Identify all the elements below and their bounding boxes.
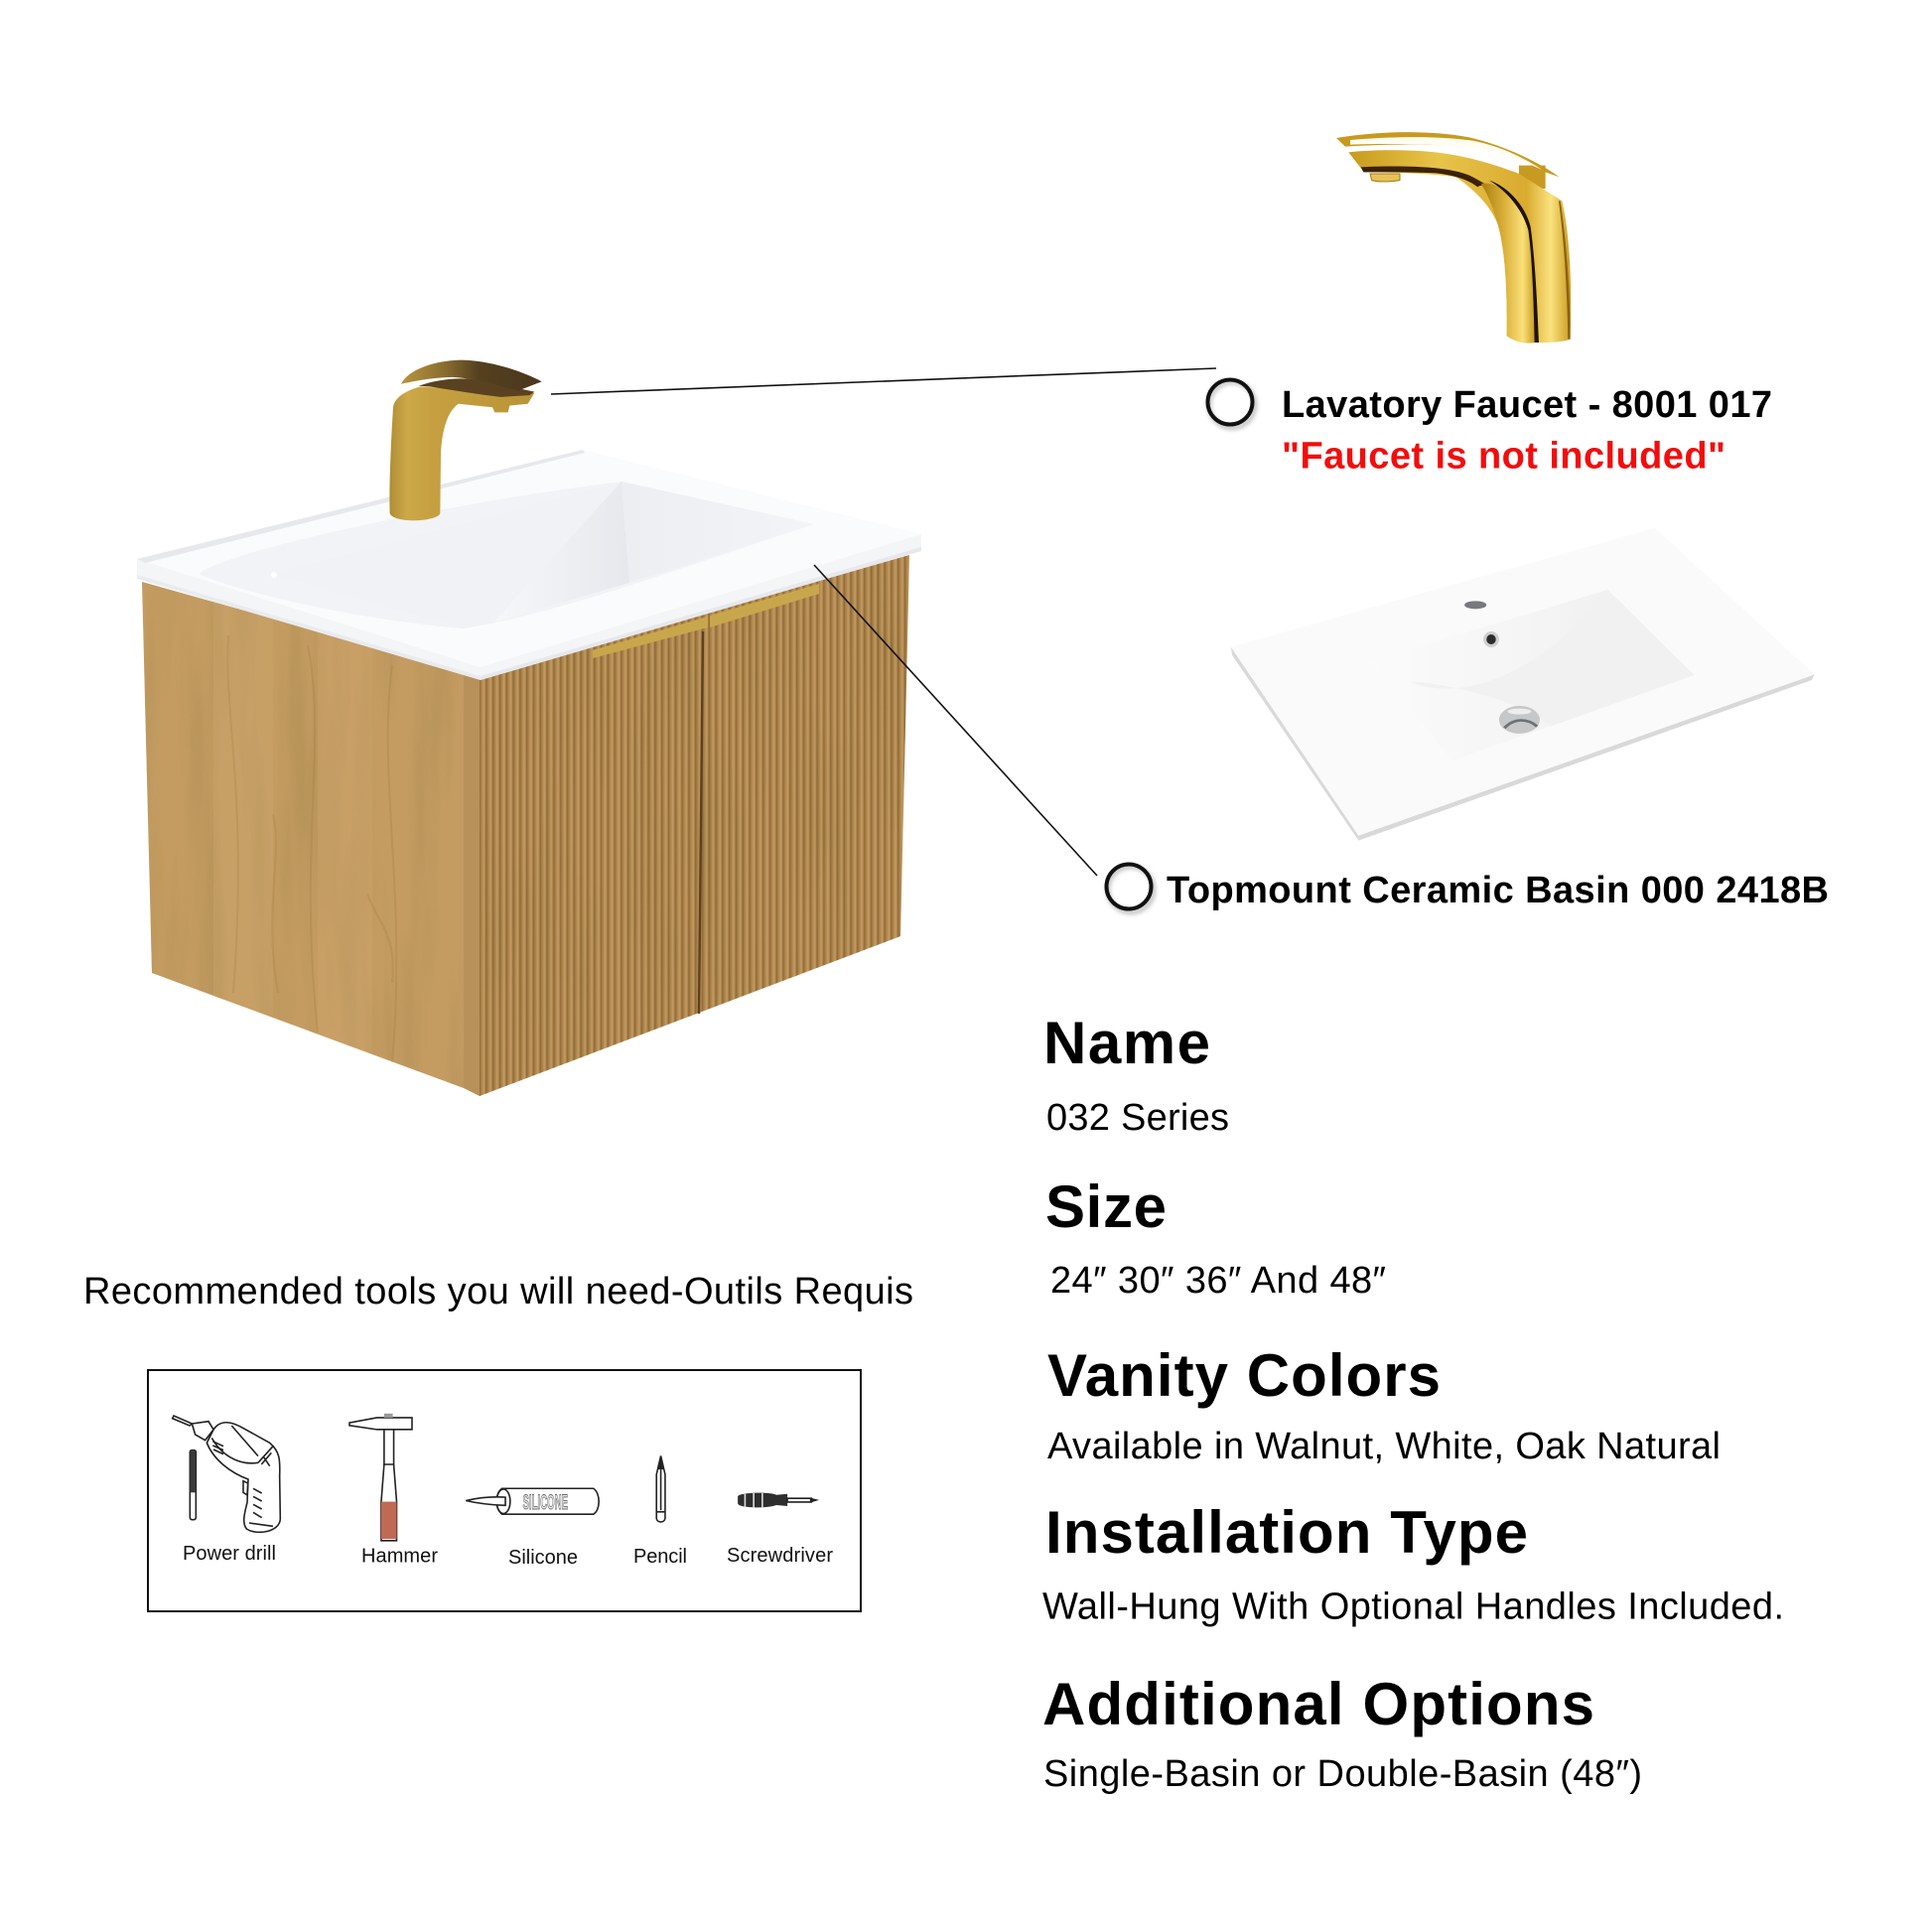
panel: tools: [148, 1370, 861, 1611]
heading: recommended tools: Recommended tools you will need-Outils Requis: [83, 1271, 913, 1312]
text: name value: 032 Series: [1046, 1097, 1229, 1139]
text: additional options value: Single-Basin or Double-Basin (48″): [1043, 1753, 1642, 1795]
callout: faucet model name: Lavatory Faucet - 8001 017: [1282, 384, 1772, 426]
faucet on vanity: [389, 360, 542, 520]
callout: basin marker: [1106, 864, 1154, 912]
gold faucet product image: [1336, 132, 1571, 344]
callout: faucet not included note: "Faucet is not included": [1282, 435, 1725, 477]
sink countertop: [137, 450, 921, 680]
heading: installation type: Installation Type: [1045, 1499, 1528, 1566]
icon: power drill: [173, 1416, 280, 1532]
icon: screwdriver: [738, 1493, 819, 1507]
label: hammer: Hammer: [361, 1545, 438, 1567]
text: size value: 24″ 30″ 36″ And 48″: [1050, 1260, 1386, 1302]
cabinet side panel: [142, 582, 480, 1096]
label: pencil: Pencil: [633, 1546, 687, 1568]
label: screwdriver: Screwdriver: [727, 1545, 833, 1567]
heading: vanity colors: Vanity Colors: [1047, 1342, 1441, 1409]
icon: hammer: [349, 1414, 412, 1541]
leader line to faucet: [551, 368, 1216, 394]
icon: silicone tube: [466, 1488, 599, 1514]
label: silicone: Silicone: [508, 1547, 578, 1569]
leader line to basin: [814, 565, 1097, 876]
icon: silicone tube: SILICONE: [522, 1491, 568, 1514]
ceramic basin product image: [1231, 528, 1815, 841]
callout: basin model name: Topmount Ceramic Basin 000 2418B: [1167, 870, 1829, 911]
cabinet fluted doors: [477, 551, 913, 1102]
text: installation type value: Wall-Hung With Optional Handles Included.: [1042, 1587, 1784, 1628]
heading: additional options: Additional Options: [1042, 1671, 1594, 1737]
label: power drill: Power drill: [183, 1543, 276, 1565]
text: vanity colors value: Available in Walnut, White, Oak Natural: [1047, 1426, 1721, 1467]
heading: size: Size: [1045, 1173, 1167, 1240]
vanity cabinet with sink and faucet: [137, 360, 921, 1102]
gold door handles: [593, 584, 819, 658]
icon: pencil: [656, 1455, 665, 1522]
basin bowl: [271, 482, 814, 628]
heading: name: Name: [1043, 1010, 1210, 1076]
callout: faucet marker: [1207, 379, 1255, 428]
